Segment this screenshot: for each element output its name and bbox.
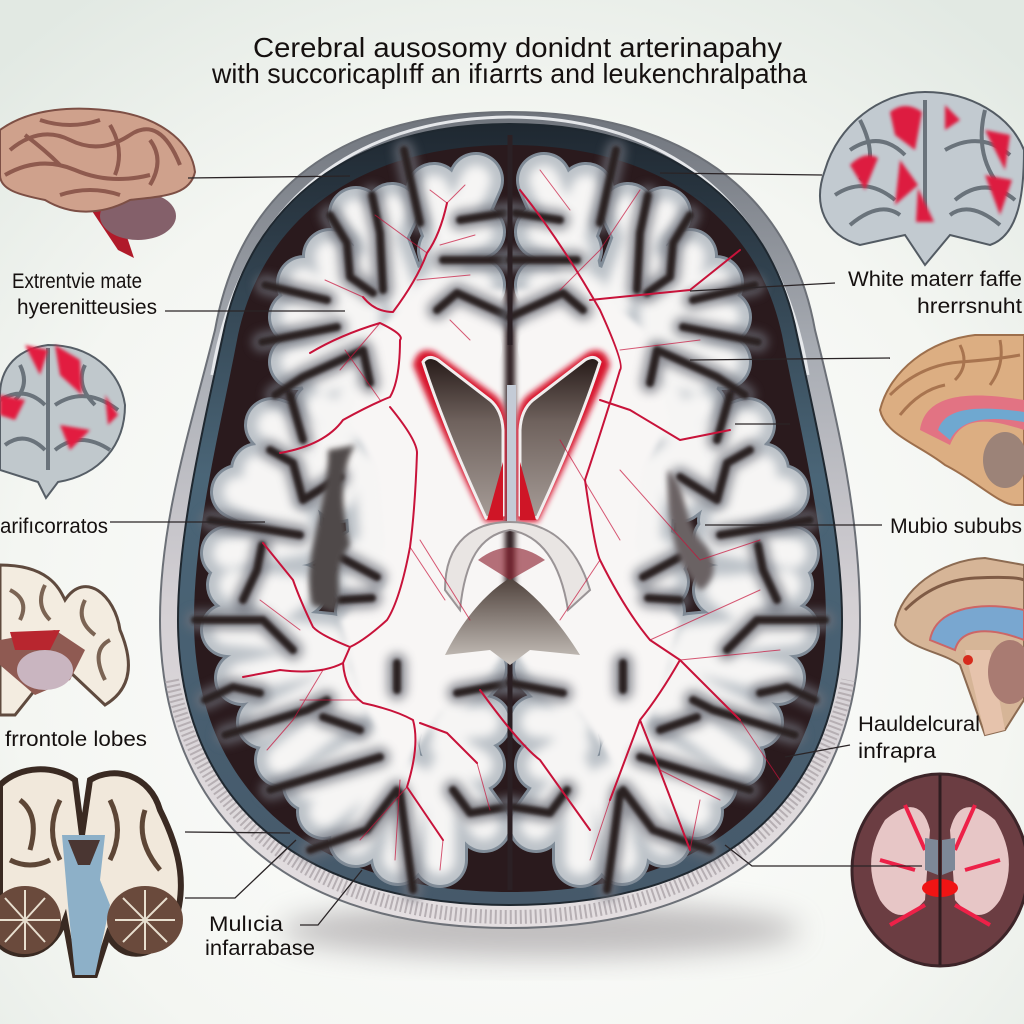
label: frontal lobes: frrontole lobes [5, 728, 147, 751]
dark subarachnoid space [194, 145, 826, 892]
brain icon: left bottom coronal [0, 769, 183, 975]
right ventricle [520, 357, 600, 518]
label: perforators: arifıcorratos [0, 515, 108, 538]
dura blue ring [178, 124, 842, 905]
label: extreme white matter [12, 270, 157, 319]
brain icon: lateral top left [0, 109, 195, 258]
label: multiple infarcts bottom: infarrabase [205, 937, 315, 960]
central axial brain section [160, 112, 860, 928]
midline fissure [508, 135, 512, 890]
right sylvian sulcus [668, 470, 714, 590]
septum [507, 385, 516, 525]
label: white matter right [848, 268, 1022, 318]
brain icon: right sagittal tan [880, 335, 1024, 505]
label: multiple infarcts bottom [205, 913, 315, 960]
label: lacunar infarcts right [858, 713, 980, 763]
left hemisphere gyri [228, 180, 484, 860]
label: extreme white matter: Extrentvie mate [12, 270, 142, 293]
brain icon: left coronal [0, 565, 128, 715]
right hemisphere gyri [536, 180, 792, 860]
label: lacunar infarcts right: Hauldelcural [858, 713, 980, 736]
label: white matter right: hrerrsnuht [917, 295, 1022, 318]
brain icon: left with red lesions [0, 345, 125, 498]
lateral ventricles [413, 350, 610, 525]
skull cast shadow [280, 902, 800, 958]
midbrain wedge [445, 578, 580, 665]
leader lines [110, 173, 922, 925]
skull highlight [212, 117, 808, 375]
title: Cerebral ausosomy donidnt arterinapahy [253, 32, 782, 63]
skull outer ring [160, 112, 860, 928]
right ventricle glow [516, 350, 610, 522]
label: multiple infarcts bottom: Mulıcia [209, 913, 283, 936]
fornix arch [445, 522, 590, 610]
label: white matter right: White materr faffe [848, 268, 1022, 291]
title: with succoricaplıff an ifıarrts and leukenchralpatha [211, 58, 807, 89]
left ventricle [423, 357, 503, 518]
right sulci shadows [510, 150, 825, 890]
label: subcortical: Mubio sububs [890, 515, 1022, 538]
label: extreme white matter: hyerenitteusies [17, 296, 157, 319]
skull ridged band [172, 680, 848, 917]
left ventricle glow [413, 350, 507, 522]
label: lacunar infarcts right: infrapra [858, 740, 936, 763]
brain icon: right sagittal [895, 558, 1024, 735]
brain icon: top right with red lesions [820, 92, 1024, 265]
brain icon: right bottom axial red [852, 774, 1024, 966]
red vessels [243, 170, 780, 870]
left sylvian sulcus [309, 445, 355, 612]
central white matter [340, 285, 680, 770]
title [211, 32, 807, 89]
left sulci shadows [195, 150, 510, 890]
